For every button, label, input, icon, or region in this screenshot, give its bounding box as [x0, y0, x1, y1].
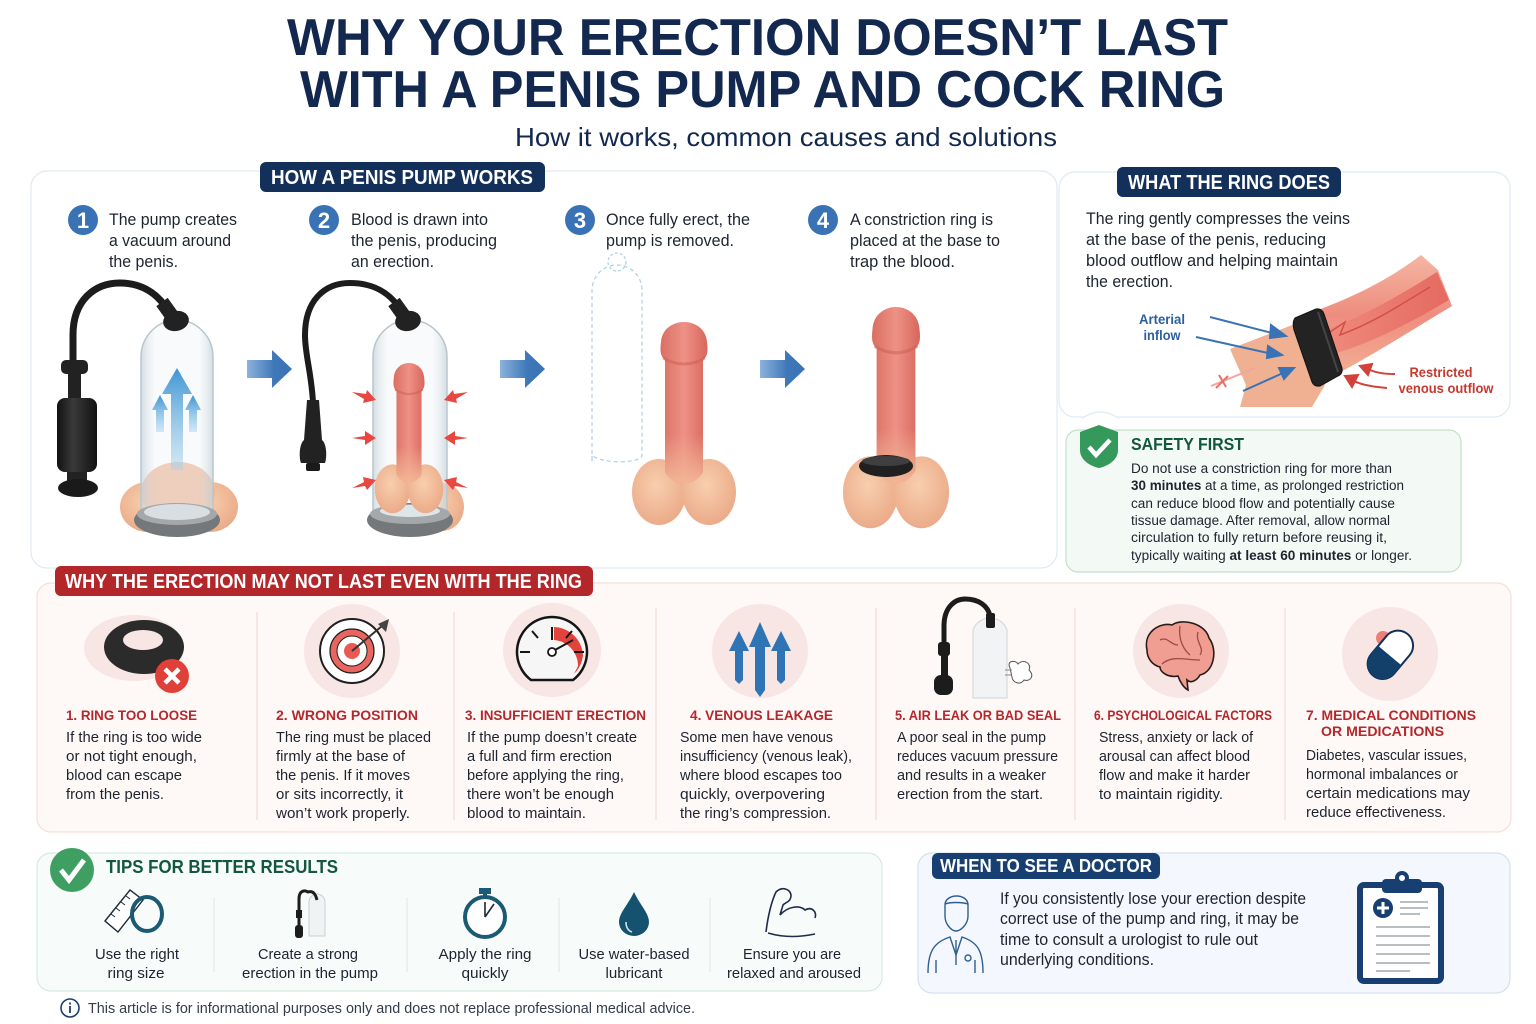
cause 2 text: The ring must be placed	[276, 730, 431, 746]
cause 6 text: Stress, anxiety or lack of	[1099, 730, 1254, 746]
tip 4 text	[578, 947, 690, 982]
cause 1 text: or not tight enough,	[66, 749, 197, 765]
step 2 text: Blood is drawn into	[351, 211, 488, 229]
tip 1	[95, 890, 179, 982]
tip 3	[438, 888, 532, 982]
heading: what the ring does	[1117, 167, 1341, 197]
doctor text: If you consistently lose your erection despite	[1000, 890, 1306, 908]
cause 3 title: 3. INSUFFICIENT ERECTION	[465, 707, 646, 723]
cause 6 text: arousal can affect blood	[1099, 749, 1250, 765]
cause 5 text: and results in a weaker	[897, 768, 1046, 784]
ring explanation text: the erection.	[1086, 273, 1173, 291]
cause 4 text: insufficiency (venous leak),	[680, 749, 852, 765]
cause 5	[895, 599, 1061, 803]
panel: why the erection may not last	[37, 566, 1511, 832]
cause 3 text	[467, 730, 637, 822]
title: WHY YOUR ERECTION DOESN’T LAST	[287, 9, 1228, 67]
step 4 text: trap the blood.	[850, 253, 955, 271]
icon: capsule	[1342, 607, 1438, 701]
tip 3 text	[438, 947, 532, 982]
cause 3 text: before applying the ring,	[467, 768, 624, 784]
doctor text	[1000, 890, 1306, 969]
panel: tips for better results	[37, 848, 882, 991]
cause 7 text: certain medications may	[1306, 786, 1471, 802]
safety heading: SAFETY FIRST	[1131, 434, 1244, 454]
tip 3 text: quickly	[462, 966, 509, 982]
subtitle: How it works, common causes and solutions	[515, 122, 1057, 152]
heading: when to see a doctor: WHEN TO SEE A DOCTOR	[940, 856, 1152, 876]
step 2 text	[309, 205, 497, 271]
cause 6 text: flow and make it harder	[1099, 768, 1250, 784]
title: WITH A PENIS PUMP AND COCK RING	[300, 61, 1225, 119]
ring explanation text: The ring gently compresses the veins	[1086, 210, 1350, 228]
heading: what the ring does: WHAT THE RING DOES	[1128, 172, 1330, 194]
panel: how a penis pump works	[31, 162, 1057, 568]
heading: why the erection may not last: WHY THE ERECTION MAY NOT LAST EVEN WITH THE RING	[65, 571, 582, 593]
panel: safety first	[1066, 425, 1461, 572]
red pressure arrows	[352, 390, 468, 490]
illustration: anatomy with constriction ring	[843, 307, 949, 528]
icon: water drop	[619, 892, 649, 936]
step 1 text	[68, 205, 237, 271]
cause 5 title: 5. AIR LEAK OR BAD SEAL	[895, 707, 1061, 723]
cause 4 text: where blood escapes too	[679, 768, 842, 784]
icon: small pump	[295, 891, 325, 938]
diagram labels: Arterial	[1139, 311, 1185, 327]
tip 5 text: Ensure you are	[743, 947, 841, 963]
cause 6 title: 6. PSYCHOLOGICAL FACTORS	[1094, 707, 1272, 723]
step 2 text: the penis, producing	[351, 232, 497, 250]
cause 3	[465, 603, 646, 822]
heading: how a penis pump works	[260, 162, 545, 192]
cause 7 title: OR MEDICATIONS	[1321, 723, 1444, 739]
step 4 text: 4	[817, 208, 830, 233]
tip 1 text: Use the right	[95, 947, 179, 963]
cause 7 text: hormonal imbalances or	[1306, 767, 1458, 783]
tip 5	[727, 889, 861, 982]
step 3 text: Once fully erect, the	[606, 211, 750, 229]
cause 2 text	[275, 730, 431, 822]
cause 2	[275, 604, 431, 822]
cause 7 title: 7. MEDICAL CONDITIONS	[1306, 707, 1476, 723]
cause 1 title: 1. RING TOO LOOSE	[66, 707, 197, 723]
diagram labels: inflow	[1144, 327, 1181, 343]
cause 5 text	[897, 730, 1058, 803]
tip 4 text: Use water-based	[578, 947, 690, 963]
cause 7 text: reduce effectiveness.	[1306, 805, 1446, 821]
illustration: pump with vacuum	[57, 283, 238, 537]
step 4 text	[808, 205, 1000, 271]
safety text: Do not use a constriction ring for more than	[1131, 461, 1392, 476]
panel: what the ring does	[1059, 167, 1510, 418]
icon: ruler and ring	[105, 890, 162, 932]
step 2 text: an erection.	[351, 253, 434, 271]
tip 1 text	[95, 947, 179, 982]
panel: when to see a doctor	[918, 853, 1510, 993]
icon: upward arrows	[712, 604, 808, 698]
ring explanation text: blood outflow and helping maintain	[1086, 252, 1338, 270]
cause 1 text	[66, 730, 202, 803]
step 1 text: The pump creates	[109, 211, 237, 229]
icon: loose ring	[84, 615, 189, 693]
illustration: ring cross-section diagram	[1139, 255, 1494, 407]
diagram labels: venous outflow	[1398, 380, 1494, 396]
diagram labels	[1139, 311, 1494, 396]
cause 2 text: won’t work properly.	[275, 806, 410, 822]
icon: flexed arm	[766, 889, 815, 936]
tip 2 text: erection in the pump	[242, 966, 378, 982]
icon: leaking pump	[934, 599, 1032, 698]
cause 3 text: there won’t be enough	[467, 787, 614, 803]
cause 2 text: or sits incorrectly, it	[276, 787, 403, 803]
safety text: circulation to fully return before reusing it,	[1131, 530, 1387, 545]
cause 1	[66, 615, 202, 803]
doctor text: underlying conditions.	[1000, 951, 1154, 969]
diagram labels: Restricted	[1410, 364, 1472, 380]
step 2 text: 2	[318, 208, 330, 233]
cause 7 title	[1306, 707, 1476, 739]
title	[287, 9, 1228, 119]
step 4 text: A constriction ring is	[850, 211, 993, 229]
cause 3 text: If the pump doesn’t create	[467, 730, 637, 746]
cause 1 text: If the ring is too wide	[66, 730, 202, 746]
cause 4 title: 4. VENOUS LEAKAGE	[690, 707, 833, 723]
cause 6 text	[1099, 730, 1254, 803]
illustration: pump with blood drawn in	[300, 283, 468, 537]
cause 5 text: reduces vacuum pressure	[897, 749, 1058, 765]
heading: why the erection may not last	[55, 566, 593, 596]
icon: green check	[50, 848, 94, 892]
tip 2 text: Create a strong	[258, 947, 358, 963]
step 3 text: 3	[574, 208, 586, 233]
cause 2 title: 2. WRONG POSITION	[276, 707, 418, 723]
icon: gauge	[503, 603, 601, 697]
tip 4	[578, 892, 690, 982]
cause 4 text	[679, 730, 852, 822]
tip 3 text: Apply the ring	[438, 947, 532, 963]
cause 3 text: a full and firm erection	[467, 749, 612, 765]
icon: stopwatch	[465, 888, 505, 937]
doctor text: correct use of the pump and ring, it may be	[1000, 910, 1299, 928]
step 3 text	[565, 205, 750, 250]
icon: brain	[1133, 604, 1229, 698]
ring explanation text	[1086, 210, 1350, 291]
safety text: tissue damage. After removal, allow normal	[1131, 513, 1390, 528]
doctor text: time to consult a urologist to rule out	[1000, 931, 1258, 949]
arrow: step 1 to 2	[247, 350, 292, 388]
cause 1 text: blood can escape	[66, 768, 182, 784]
tip 5 text: relaxed and aroused	[727, 966, 861, 982]
tip 4 text: lubricant	[606, 966, 662, 982]
heading: how a penis pump works: HOW A PENIS PUMP WORKS	[271, 167, 533, 189]
safety text: typically waiting at least 60 minutes or longer.	[1131, 548, 1412, 563]
arrow: step 3 to 4	[760, 350, 805, 388]
cause 1 text: from the penis.	[66, 787, 164, 803]
cause 4 text: the ring’s compression.	[680, 806, 831, 822]
safety text: 30 minutes at a time, as prolonged restriction	[1131, 478, 1404, 493]
step 1 text: 1	[77, 208, 89, 233]
red restricted arrows	[1211, 364, 1395, 388]
arrow: step 2 to 3	[500, 350, 545, 388]
cause 5 text: A poor seal in the pump	[897, 730, 1046, 746]
cause 7 text	[1306, 748, 1471, 821]
step 3 text: pump is removed.	[606, 232, 734, 250]
step 4 text: placed at the base to	[850, 232, 1000, 250]
icon: doctor	[928, 896, 983, 973]
safety text: can reduce blood flow and potentially cause	[1131, 496, 1395, 511]
step 1 text: the penis.	[109, 253, 178, 271]
disclaimer: This article is for informational purposes only and does not replace professional medical advice.	[88, 1001, 695, 1017]
cause 4 text: Some men have venous	[680, 730, 833, 746]
cause 7	[1306, 607, 1476, 821]
ring explanation text: at the base of the penis, reducing	[1086, 231, 1326, 249]
cause 4 text: quickly, overpovering	[680, 787, 825, 803]
cause 6 text: to maintain rigidity.	[1099, 787, 1223, 803]
cause 6	[1094, 604, 1272, 803]
cause 7 text: Diabetes, vascular issues,	[1306, 748, 1467, 764]
tip 1 text: ring size	[108, 966, 164, 982]
cause 2 text: the penis. If it moves	[276, 768, 410, 784]
tip 2	[242, 891, 378, 982]
icon: clipboard	[1360, 871, 1441, 981]
blue inflow arrows	[1196, 317, 1294, 391]
cause 4	[679, 604, 852, 822]
tip 5 text	[727, 947, 861, 982]
cause 3 text: blood to maintain.	[467, 806, 586, 822]
icon: target	[304, 604, 400, 698]
illustration: removed pump outline and erect anatomy	[592, 253, 736, 525]
step 1 text: a vacuum around	[109, 232, 231, 250]
icon: shield	[1080, 425, 1118, 468]
safety text	[1131, 461, 1412, 563]
cause 2 text: firmly at the base of	[276, 749, 406, 765]
cause 5 text: erection from the start.	[897, 787, 1043, 803]
tip 2 text	[242, 947, 378, 982]
tips heading: TIPS FOR BETTER RESULTS	[106, 857, 338, 877]
